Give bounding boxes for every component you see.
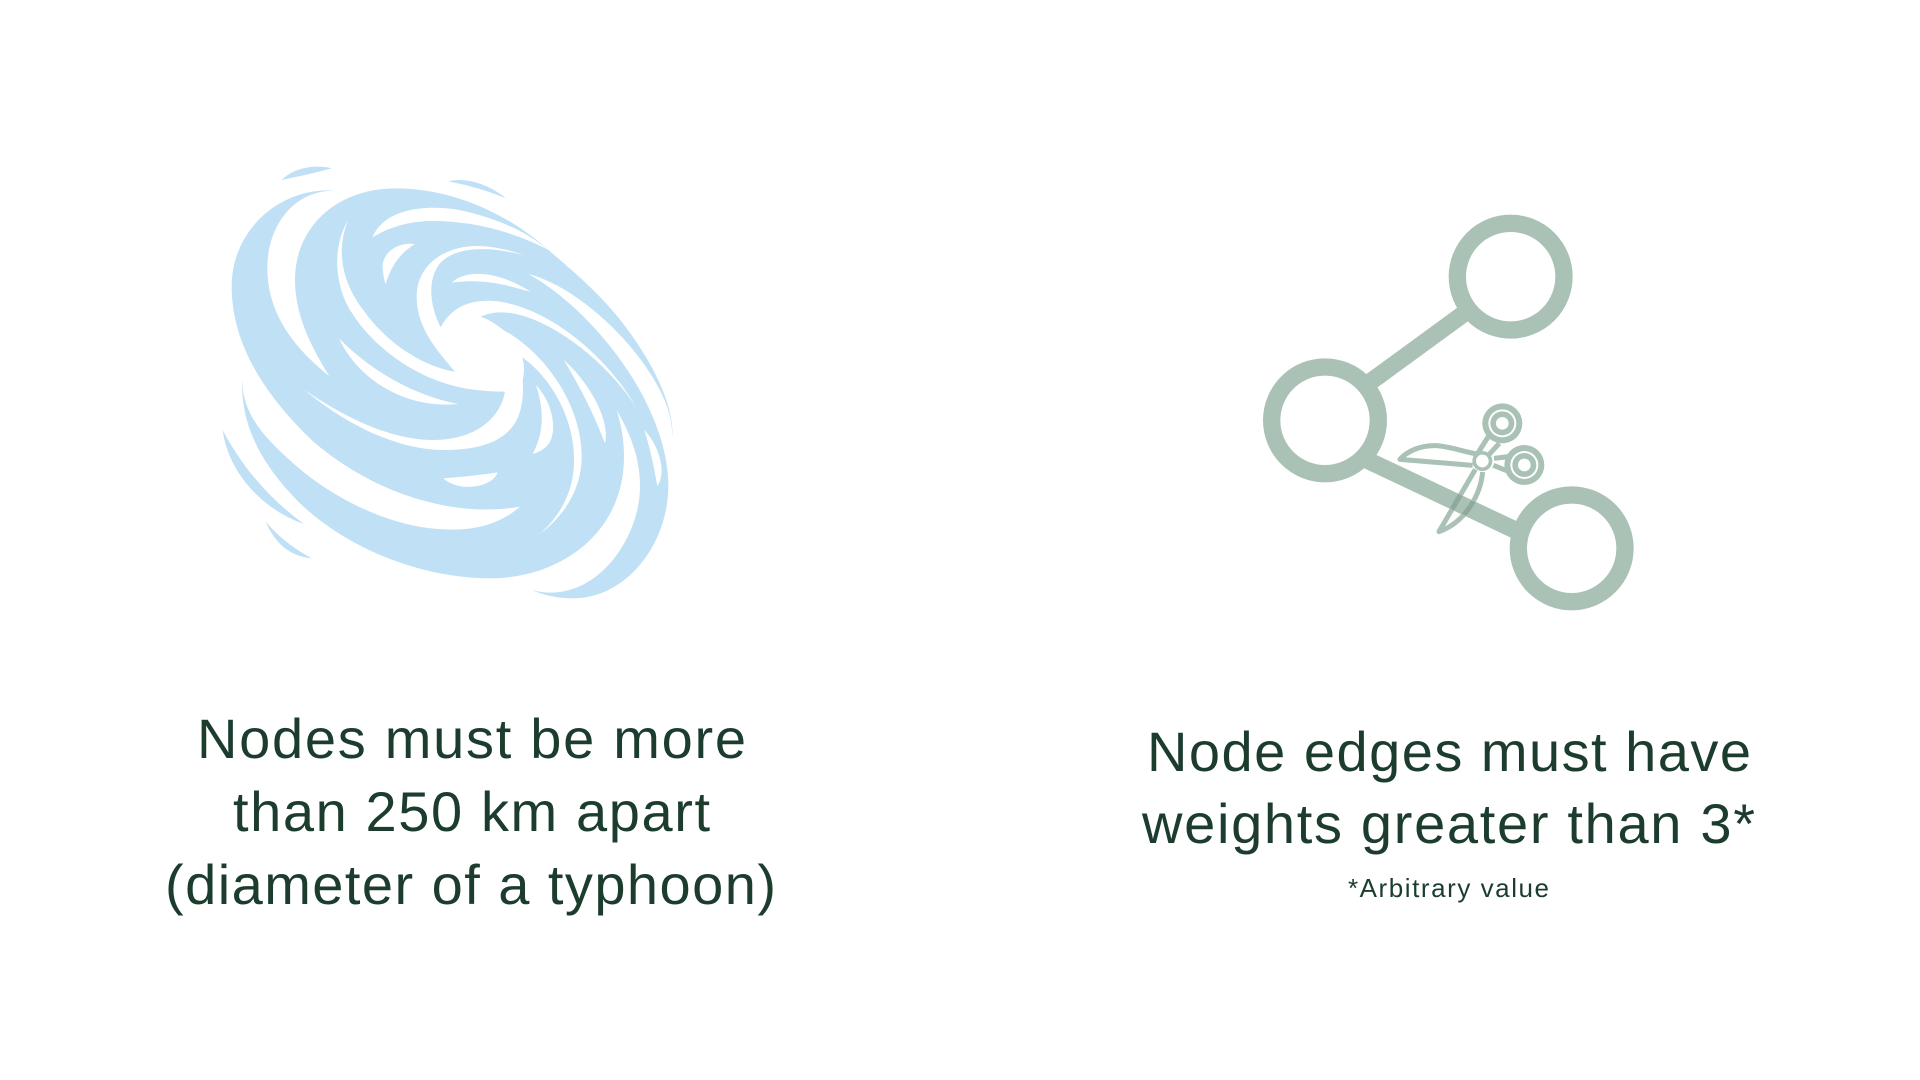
text: weight rule: Node edges must have <box>1147 720 1751 783</box>
node: bottom right <box>1518 495 1625 602</box>
icon: node graph with cut edge <box>1272 223 1625 602</box>
icon: scissors <box>1400 403 1544 532</box>
text: distance rule: than 250 km apart <box>233 780 710 843</box>
text: distance rule: Nodes must be more <box>197 707 746 770</box>
node: left <box>1272 367 1378 474</box>
icon: typhoon swirl <box>223 167 673 598</box>
edge: bottom link <box>1368 461 1515 530</box>
text: footnote: *Arbitrary value <box>1348 873 1549 903</box>
node: top right <box>1457 223 1564 330</box>
text: weight rule: weights greater than 3* <box>1141 792 1755 855</box>
edge: top link <box>1371 314 1463 382</box>
text: weight rule <box>1141 720 1755 855</box>
text: distance rule <box>165 707 776 916</box>
text: distance rule: (diameter of a typhoon) <box>165 853 776 916</box>
